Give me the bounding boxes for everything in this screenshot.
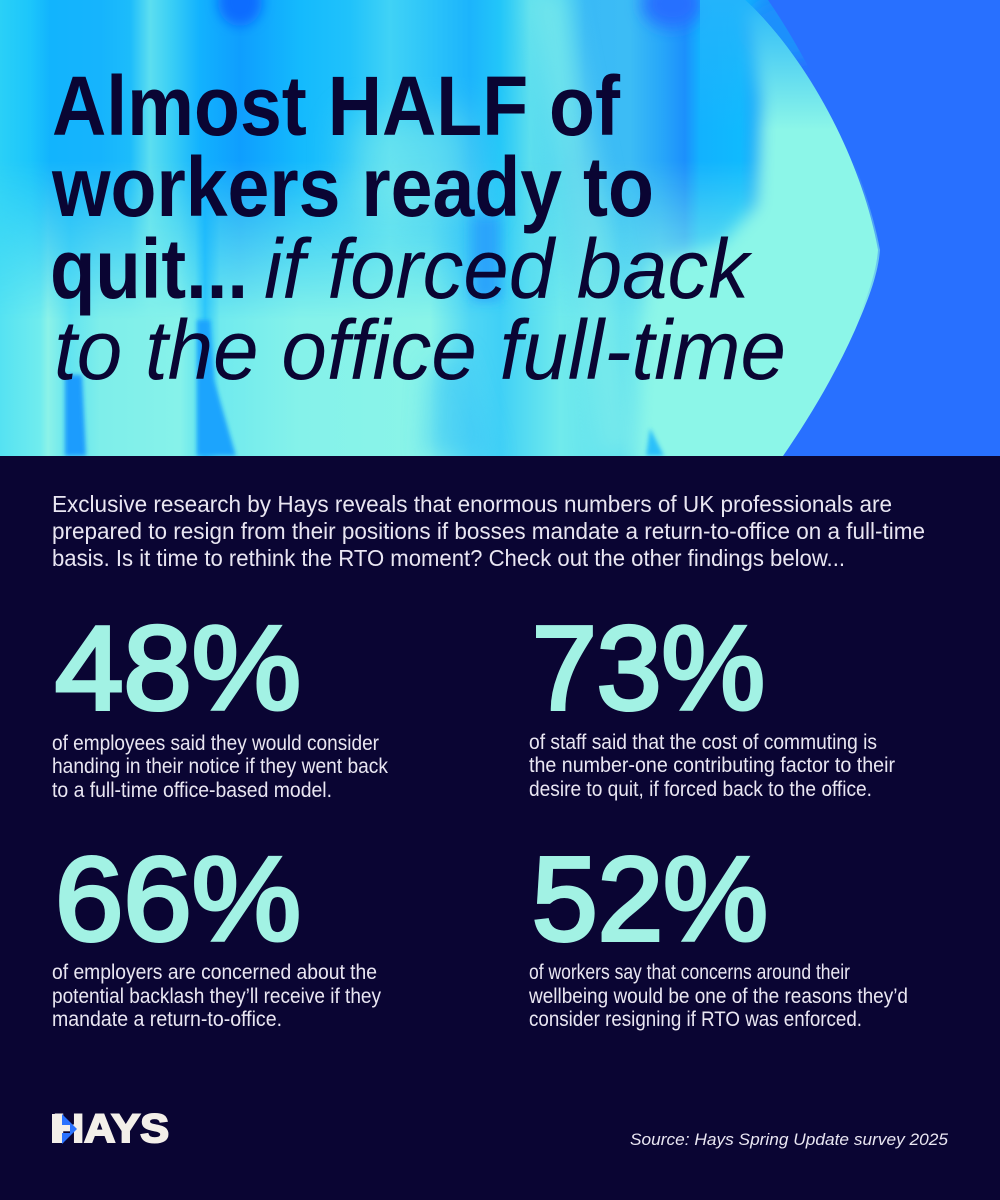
stat: 73% <box>529 602 895 801</box>
stat: 48%: handing in their notice if they went back <box>52 755 388 778</box>
title <box>50 59 786 397</box>
title: Almost HALF of <box>52 59 621 153</box>
stat: 48%: to a full-time office-based model. <box>52 779 332 802</box>
title: quit... <box>50 222 248 316</box>
intro paragraph: Exclusive research by Hays reveals that enormous numbers of UK professionals are <box>52 491 892 517</box>
stat: 73%: desire to quit, if forced back to the office. <box>529 778 872 801</box>
stat: 52%: consider resigning if RTO was enforced. <box>529 1008 862 1031</box>
stat: 66%: 66% <box>55 833 301 966</box>
stat: 66%: mandate a return-to-office. <box>52 1008 282 1031</box>
intro paragraph: prepared to resign from their positions if bosses mandate a return-to-office on a full-time <box>52 518 925 544</box>
stat: 73%: of staff said that the cost of commuting is <box>529 731 877 754</box>
title: workers ready to <box>51 140 654 234</box>
stat: 52%: 52% <box>532 833 768 966</box>
intro paragraph: basis. Is it time to rethink the RTO moment? Check out the other findings below... <box>52 545 845 571</box>
stat: 48% <box>52 602 388 802</box>
stat: 66% <box>52 833 381 1031</box>
intro paragraph <box>52 491 925 571</box>
logo: Hays: HAYS <box>53 1107 169 1151</box>
header gradient artwork <box>0 0 1000 470</box>
stat: 52% <box>528 833 908 1031</box>
stat: 48%: 48% <box>55 602 301 735</box>
stat: 52%: of workers say that concerns around their <box>529 961 850 984</box>
source note: Source: Hays Spring Update survey 2025 <box>630 1130 949 1149</box>
stat: 48%: of employees said they would consider <box>52 732 379 755</box>
stat: 73%: the number-one contributing factor to their <box>529 754 895 777</box>
stat: 73%: 73% <box>532 602 765 735</box>
icon: logo arrow <box>62 1114 77 1144</box>
title: if forced back <box>264 222 753 316</box>
stat: 66%: potential backlash they’ll receive if they <box>52 985 381 1008</box>
title: to the office full-time <box>54 303 786 397</box>
stat: 66%: of employers are concerned about the <box>52 961 377 984</box>
stat: 52%: wellbeing would be one of the reasons they’d <box>528 985 908 1008</box>
